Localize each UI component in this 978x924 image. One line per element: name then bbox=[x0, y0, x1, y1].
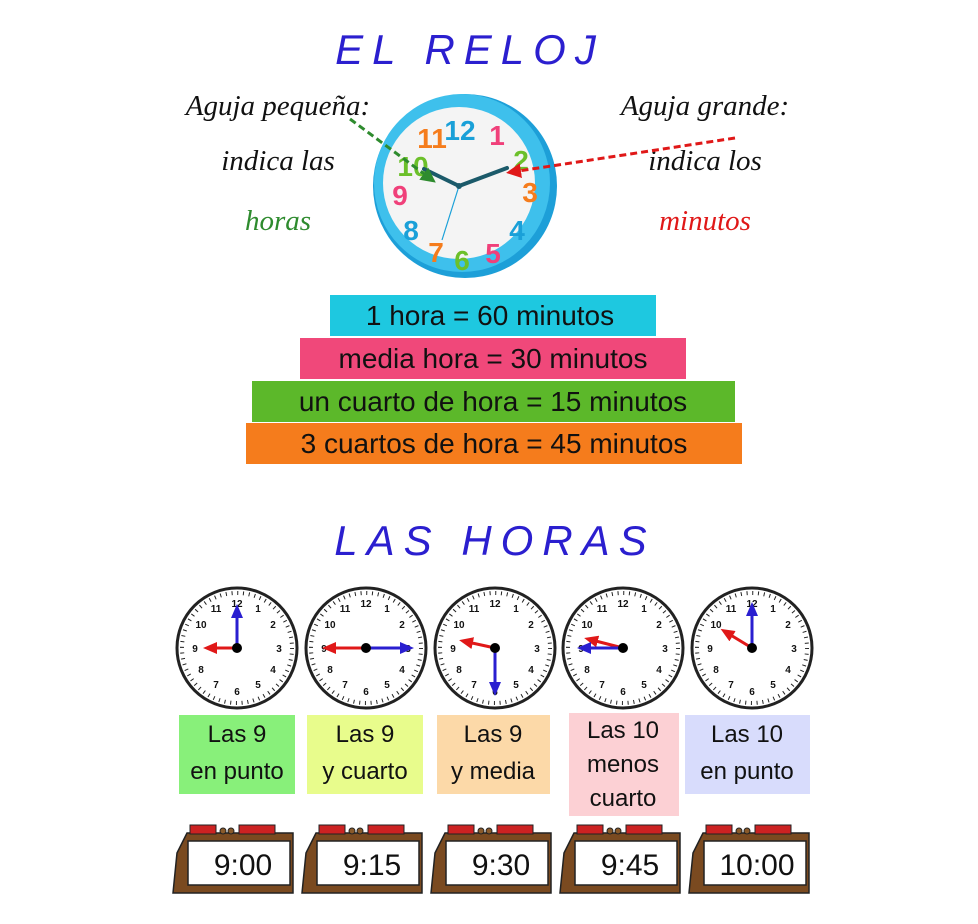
labels: Las 9 bbox=[336, 721, 394, 748]
text: aguja pequeña: indica las bbox=[221, 145, 335, 177]
labels: y media bbox=[451, 758, 536, 785]
labels: en punto bbox=[190, 758, 284, 785]
bars: equivalences: 1 hora = 60 minutos bbox=[366, 300, 614, 331]
arrow: green to hour hand bbox=[350, 119, 431, 179]
arrow: red to minute hand bbox=[512, 138, 735, 172]
digital clocks: 10:00 bbox=[719, 849, 795, 882]
big clock: 1 bbox=[489, 120, 505, 151]
labels: en punto bbox=[700, 758, 794, 785]
title: EL RELOJ: EL RELOJ bbox=[335, 26, 605, 73]
title: LAS HORAS: LAS HORAS bbox=[334, 517, 656, 564]
big clock: 5 bbox=[485, 238, 501, 269]
text: aguja grande bbox=[619, 90, 789, 237]
digital clocks: 9:15 bbox=[343, 849, 401, 882]
big clock: 2 bbox=[513, 145, 529, 176]
big clock: 12 bbox=[444, 115, 476, 146]
analog clocks bbox=[177, 588, 812, 708]
big clock: 6 bbox=[454, 245, 470, 276]
big clock bbox=[373, 94, 557, 278]
big clock: 11 bbox=[417, 123, 447, 154]
labels: menos bbox=[587, 751, 659, 778]
text: aguja pequeña: horas bbox=[245, 205, 311, 237]
bars: equivalences: un cuarto de hora = 15 minutos bbox=[299, 386, 687, 417]
digital clocks: 9:30 bbox=[472, 849, 530, 882]
labels: Las 9 bbox=[208, 721, 266, 748]
labels: cuarto bbox=[590, 785, 656, 812]
digital clocks: 9:00 bbox=[214, 849, 272, 882]
digital clocks bbox=[173, 825, 809, 893]
digital clocks: 9:45 bbox=[601, 849, 659, 882]
text: aguja pequeña: Aguja pequeña: bbox=[184, 90, 370, 122]
big clock: 7 bbox=[428, 237, 444, 268]
labels: Las 10 bbox=[711, 721, 783, 748]
labels bbox=[179, 713, 810, 816]
big clock: 9 bbox=[392, 180, 408, 211]
text: aguja grande: minutos bbox=[659, 205, 751, 237]
bars: equivalences: media hora = 30 minutos bbox=[339, 343, 647, 374]
text: aguja pequeña bbox=[184, 90, 370, 237]
big clock: 10 bbox=[397, 151, 429, 182]
text: aguja grande: indica los bbox=[648, 145, 762, 177]
bars: equivalences: 3 cuartos de hora = 45 minutos bbox=[301, 428, 687, 459]
bars: equivalences bbox=[246, 295, 742, 464]
text: aguja grande: Aguja grande: bbox=[619, 90, 789, 122]
big clock: 3 bbox=[522, 177, 538, 208]
big clock: 4 bbox=[509, 215, 525, 246]
labels: Las 10 bbox=[587, 717, 659, 744]
labels: y cuarto bbox=[322, 758, 408, 785]
labels: Las 9 bbox=[464, 721, 522, 748]
big clock: 8 bbox=[403, 215, 419, 246]
